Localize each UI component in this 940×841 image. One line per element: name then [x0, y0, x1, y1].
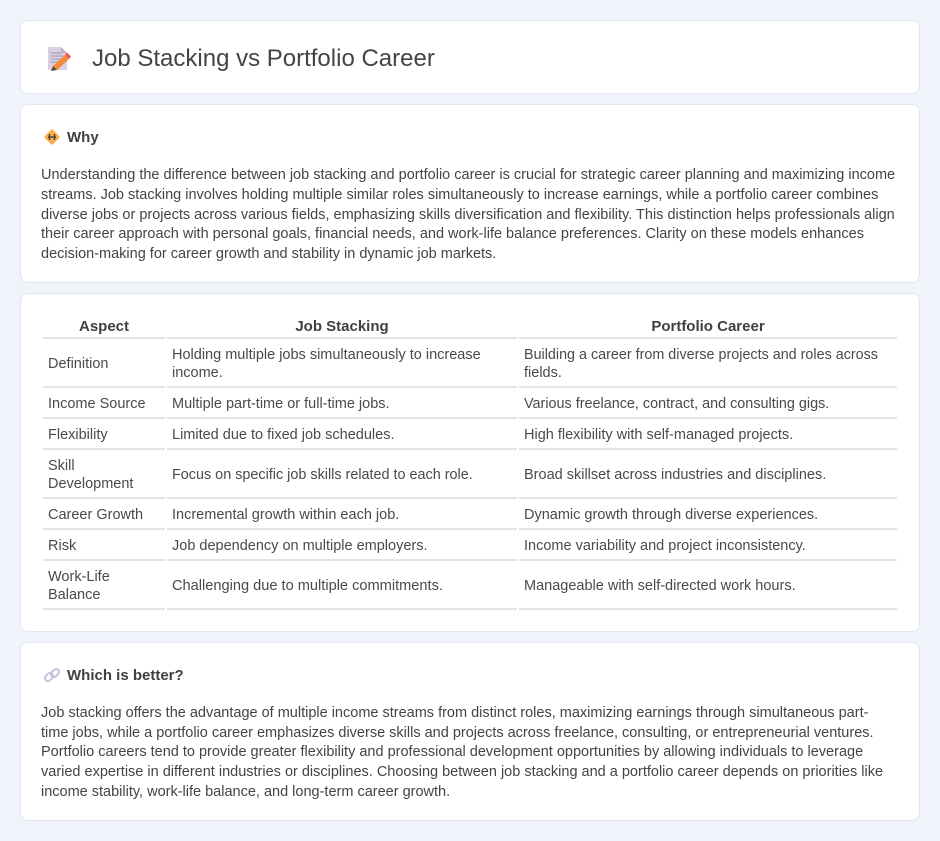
icon: chain link [44, 668, 60, 682]
title: Job Stacking vs Portfolio Career [92, 45, 435, 72]
text: Income variability and project inconsistency. [524, 538, 806, 554]
panel: which is better [20, 642, 920, 821]
table header: aspect: Aspect [79, 318, 129, 335]
row: definition [48, 347, 878, 381]
text: Work-Life [48, 569, 110, 585]
heading: why: Why [67, 129, 99, 146]
icon: warning diamond [44, 129, 60, 145]
row: flexibility [48, 427, 793, 443]
text: Flexibility [48, 427, 108, 443]
panel: title card [20, 20, 920, 94]
text: Skill [48, 458, 75, 474]
row: work-life balance [48, 569, 796, 603]
text: Income Source [48, 396, 146, 412]
text: Broad skillset across industries and disciplines. [524, 467, 826, 483]
text: their career approach with personal goals, financial needs, and work-life balance preferences. Clarity on these models enhances [41, 226, 864, 242]
row: risk [48, 538, 806, 554]
row: skill development [48, 458, 826, 492]
table rules [43, 337, 897, 610]
row: career growth [48, 507, 818, 523]
text: time jobs, while a portfolio career emphasizes diverse skills and projects across freelance, consulting, or entrepreneurial ventures. [41, 725, 874, 741]
text: Understanding the difference between job stacking and portfolio career is crucial for strategic career planning and maximizing income [41, 167, 895, 183]
text: Risk [48, 538, 76, 554]
text: which is better paragraph [41, 705, 883, 800]
text: varied expertise in different industries or disciplines. Choosing between job stacking and a portfolio career depends on priorities like [41, 764, 883, 780]
text: High flexibility with self-managed projects. [524, 427, 793, 443]
text: income. [172, 365, 223, 381]
text: Portfolio careers tend to provide greater flexibility and professional development opportunities by allowing individuals to leverage [41, 744, 863, 760]
text: Career Growth [48, 507, 143, 523]
text: Balance [48, 587, 100, 603]
text: Various freelance, contract, and consulting gigs. [524, 396, 829, 412]
text: fields. [524, 365, 562, 381]
text: Multiple part-time or full-time jobs. [172, 396, 390, 412]
text: Job stacking offers the advantage of multiple income streams from distinct roles, maximizing earnings through simultaneous part- [41, 705, 868, 721]
text: Definition [48, 356, 108, 372]
text: Manageable with self-directed work hours. [524, 578, 796, 594]
text: Focus on specific job skills related to each role. [172, 467, 473, 483]
text: income stability, work-life balance, and long-term career growth. [41, 784, 450, 800]
text: decision-making for career growth and stability in dynamic job markets. [41, 246, 496, 262]
text: Job dependency on multiple employers. [172, 538, 428, 554]
table header: job stacking: Job Stacking [295, 318, 389, 335]
icon: document with pencil [48, 47, 71, 71]
row: income source [48, 396, 829, 412]
text: Incremental growth within each job. [172, 507, 399, 523]
panel: comparison table [20, 293, 920, 632]
text: Challenging due to multiple commitments. [172, 578, 443, 594]
text: why paragraph [41, 167, 895, 262]
text: Holding multiple jobs simultaneously to increase [172, 347, 481, 363]
heading: which is better: Which is better? [67, 667, 184, 684]
text: Building a career from diverse projects and roles across [524, 347, 878, 363]
text: Development [48, 476, 133, 492]
text: diverse jobs or projects across various fields, emphasizing skills diversification and flexibility. This distinction helps professionals align [41, 207, 895, 223]
text: streams. Job stacking involves holding multiple similar roles simultaneously to increase earnings, while a portfolio career combines [41, 187, 878, 203]
table header: portfolio career: Portfolio Career [651, 318, 765, 335]
text: Limited due to fixed job schedules. [172, 427, 394, 443]
text: Dynamic growth through diverse experiences. [524, 507, 818, 523]
panel: why [20, 104, 920, 283]
